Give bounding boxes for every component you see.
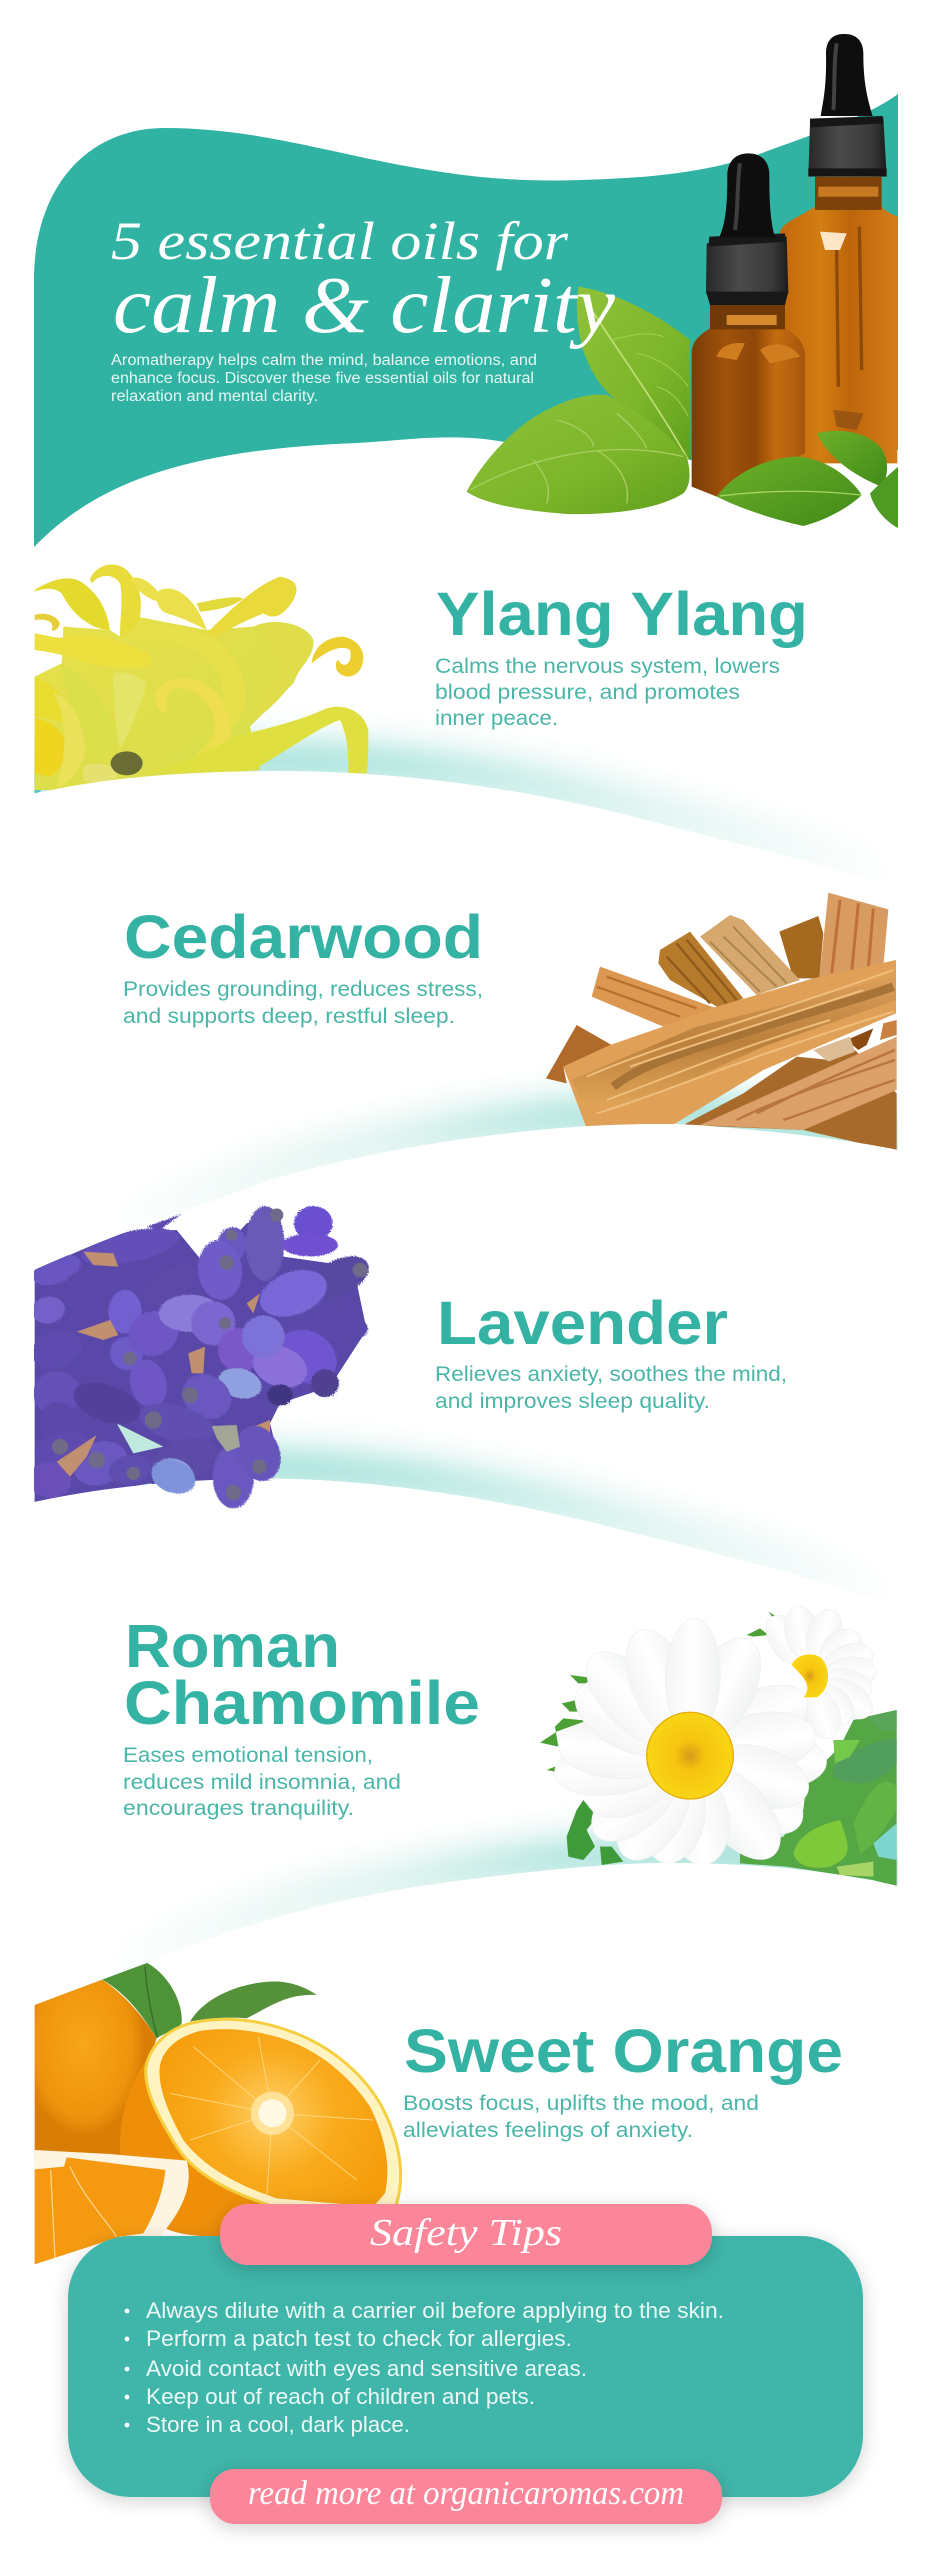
ylang ylang description — [435, 655, 780, 730]
safety tips background — [68, 2236, 863, 2497]
illustration: ylang ylang flower — [35, 564, 368, 793]
ylang ylang heading: Ylang Ylang — [436, 580, 808, 648]
sweet orange description: alleviates feelings of anxiety. — [403, 2119, 693, 2142]
roman chamomile description: encourages tranquility. — [123, 1797, 354, 1820]
panel: sweet orange — [35, 1963, 843, 2264]
read more pill — [210, 2469, 722, 2524]
safety tips pill: Safety Tips — [370, 2212, 562, 2254]
right basil leaves — [817, 431, 898, 528]
safety tips list: Store in a cool, dark place. — [146, 2412, 410, 2437]
safety tips list — [125, 2298, 724, 2437]
header panel — [34, 34, 898, 547]
roman chamomile description: reduces mild insomnia, and — [123, 1771, 401, 1794]
safety tips list: Avoid contact with eyes and sensitive areas. — [146, 2356, 587, 2381]
lavender heading: Lavender — [437, 1289, 728, 1357]
front basil leaf — [717, 457, 862, 526]
header title — [111, 211, 616, 350]
illustration: oranges and leaves — [35, 1963, 401, 2264]
small bottle — [692, 153, 805, 497]
header intro text: enhance focus. Discover these five essential oils for natural — [111, 370, 534, 387]
ylang ylang description: inner peace. — [435, 707, 558, 730]
header intro text — [111, 352, 537, 405]
roman chamomile description: Eases emotional tension, — [123, 1744, 373, 1767]
lavender description: Relieves anxiety, soothes the mind, — [435, 1363, 787, 1386]
sweet orange description: Boosts focus, uplifts the mood, and — [403, 2092, 759, 2115]
roman chamomile heading: Chamomile — [124, 1669, 480, 1737]
illustration: chamomile flowers — [540, 1603, 897, 1887]
roman chamomile description — [123, 1744, 401, 1820]
safety tips list: Always dilute with a carrier oil before applying to the skin. — [146, 2298, 724, 2323]
cedarwood description — [123, 978, 483, 1028]
lavender description: and improves sleep quality. — [435, 1390, 710, 1413]
safety tips list: Keep out of reach of children and pets. — [146, 2384, 535, 2409]
safety tips pill — [220, 2204, 712, 2265]
sweet orange heading: Sweet Orange — [404, 2017, 843, 2085]
swoosh glow — [34, 761, 898, 880]
lower basil leaf — [467, 395, 690, 514]
roman chamomile heading — [124, 1612, 480, 1737]
header intro text: relaxation and mental clarity. — [111, 388, 318, 405]
panel: ylang ylang — [34, 564, 825, 864]
white band below swoosh — [0, 1863, 932, 2560]
title line two: calm & clarity — [113, 262, 616, 350]
cedarwood description: Provides grounding, reduces stress, — [123, 978, 483, 1001]
panel: safety tips — [68, 2204, 863, 2524]
white band below swoosh — [0, 1124, 932, 2560]
panel: roman chamomile — [124, 1606, 898, 1944]
cedarwood description: and supports deep, restful sleep. — [123, 1005, 455, 1028]
teal header wave — [34, 94, 898, 547]
lavender lowest flower — [147, 1419, 288, 1508]
illustration: cedarwood sticks — [546, 893, 897, 1152]
panel: cedarwood — [124, 892, 898, 1206]
panel: lavender — [34, 1206, 826, 2368]
swoosh glow — [184, 1078, 898, 1206]
safety tips list: Perform a patch test to check for allergies. — [146, 2326, 572, 2351]
ylang ylang description: blood pressure, and promotes — [435, 681, 740, 704]
roman chamomile heading: Roman — [125, 1612, 340, 1680]
illustration: essential oil bottles and basil — [467, 34, 898, 528]
title line one: 5 essential oils for — [111, 211, 569, 271]
read more pill: read more at organicaromas.com — [248, 2475, 684, 2512]
sweet orange description — [403, 2092, 759, 2142]
white band below swoosh — [0, 771, 932, 2560]
ylang ylang description: Calms the nervous system, lowers — [435, 655, 780, 678]
white band below swoosh — [0, 1479, 932, 2560]
illustration: lavender buds — [26, 1206, 375, 1503]
lavender description — [435, 1363, 787, 1413]
upper basil leaf — [577, 287, 691, 460]
swoosh glow — [184, 1818, 898, 1944]
header intro text: Aromatherapy helps calm the mind, balance emotions, and — [111, 352, 537, 369]
cedarwood heading: Cedarwood — [124, 903, 483, 971]
large bottle — [780, 34, 897, 463]
swoosh glow — [34, 1469, 898, 1598]
